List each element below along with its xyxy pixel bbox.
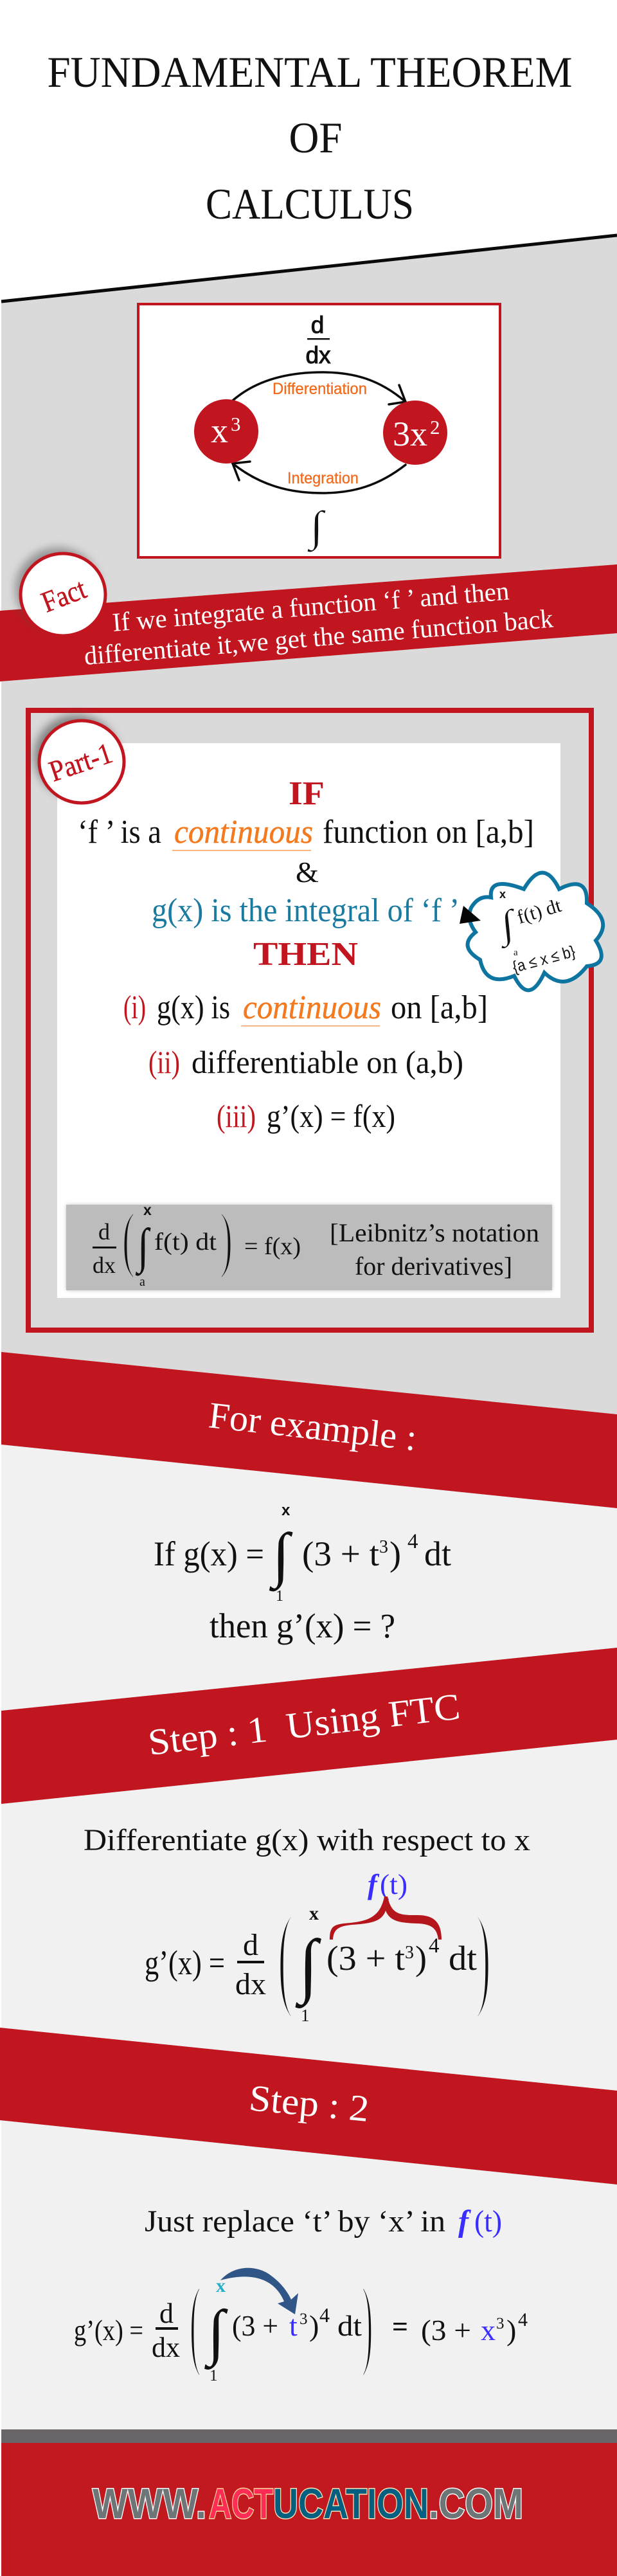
step 1 instruction: Differentiate g(x) with respect to x bbox=[84, 1823, 530, 1857]
example question bbox=[154, 1502, 451, 1645]
step 1 formula: ) bbox=[415, 1939, 427, 1977]
step 1 formula: x bbox=[309, 1903, 319, 1924]
label: integration: Integration bbox=[287, 469, 359, 487]
heading: if: IF bbox=[289, 775, 325, 812]
circle: x cubed: 3 bbox=[231, 413, 240, 435]
circle: x cubed bbox=[194, 399, 258, 464]
condition: g(x) is the integral: g(x) is the integral of ‘f ’ bbox=[152, 892, 460, 929]
formula bbox=[93, 1197, 301, 1289]
integral symbol: ∫ bbox=[307, 503, 326, 553]
step 2 formula: d bbox=[159, 2298, 174, 2329]
label: f(t) bbox=[368, 1869, 407, 1900]
banner: for example: For example : bbox=[207, 1394, 419, 1459]
condition: f is continuous bbox=[78, 814, 534, 851]
result i: continuous: on [a,b] bbox=[391, 989, 488, 1026]
result i: continuous: continuous bbox=[243, 989, 381, 1026]
derivative operator d/dx: dx bbox=[305, 342, 331, 368]
result i: continuous bbox=[123, 989, 488, 1027]
callout: cloud with integral definition: x bbox=[499, 888, 506, 901]
formula: a bbox=[139, 1275, 145, 1289]
circle: 3x squared: 2 bbox=[430, 416, 440, 438]
banner: step 1: Step : 1 Using FTC bbox=[146, 1685, 462, 1763]
banner: step 1 bbox=[1, 1648, 617, 1804]
title: OF bbox=[289, 113, 342, 162]
panel: leibniz notation bbox=[66, 1197, 552, 1290]
step 2 formula: (3 + bbox=[421, 2314, 471, 2346]
step 2 formula: 4 bbox=[518, 2309, 528, 2330]
step 2 formula bbox=[74, 2267, 528, 2384]
circle: 3x squared: 3x bbox=[393, 415, 427, 453]
example question: then g’(x) = ? bbox=[210, 1607, 395, 1645]
logo text: ACT bbox=[209, 2480, 273, 2527]
step 2 formula: ) bbox=[506, 2314, 516, 2346]
step 2 instruction: f bbox=[458, 2204, 471, 2238]
brace: f(t) bbox=[330, 1896, 442, 1940]
label: f(t): (t) bbox=[380, 1869, 407, 1900]
step 2 instruction: Just replace ‘t’ by ‘x’ in bbox=[145, 2204, 445, 2238]
footer band bbox=[1, 2429, 617, 2443]
example question: (3 + t bbox=[302, 1535, 379, 1573]
step 2 formula: g’(x) = bbox=[74, 2314, 143, 2346]
step 2 formula: dt bbox=[337, 2309, 362, 2342]
step 2 formula: (3 + bbox=[232, 2309, 278, 2342]
heading: then: THEN bbox=[253, 936, 358, 973]
panel: differentiation and integration cycle bbox=[138, 304, 500, 557]
step 2 instruction: (t) bbox=[474, 2204, 502, 2238]
result iii: derivative: (iii) bbox=[217, 1098, 256, 1134]
step 1 formula: 4 bbox=[429, 1934, 440, 1958]
ampersand: & bbox=[296, 856, 319, 888]
step 1 formula: dx bbox=[235, 1967, 266, 2001]
step 1 formula: 3 bbox=[405, 1943, 414, 1963]
title bbox=[48, 48, 572, 228]
callout: cloud with integral definition bbox=[468, 873, 603, 990]
note bbox=[330, 1218, 539, 1281]
footer: website logo bbox=[1, 2443, 617, 2576]
badge: fact: Fact bbox=[37, 572, 91, 618]
formula: ( bbox=[122, 1197, 135, 1279]
step 2 formula: t bbox=[289, 2309, 298, 2342]
example question: 4 bbox=[407, 1530, 418, 1553]
step 2 formula: ) bbox=[309, 2309, 319, 2342]
condition: f is continuous: ‘f ’ is a bbox=[78, 814, 161, 851]
callout: cloud with integral definition: {a ≤ x ≤ b} bbox=[510, 942, 577, 977]
result i: continuous: g(x) is bbox=[157, 989, 230, 1026]
result ii: differentiable: differentiable on (a,b) bbox=[192, 1044, 463, 1080]
badge: part 1: Part-1 bbox=[45, 736, 116, 788]
step 1 formula: g’(x) = bbox=[145, 1943, 225, 1982]
arrow: integration arc bbox=[233, 462, 406, 493]
callout: cloud with integral definition: ∫ bbox=[496, 901, 519, 949]
note: for derivatives] bbox=[355, 1252, 512, 1281]
logo text bbox=[93, 2480, 523, 2527]
step 2 formula: 4 bbox=[319, 2303, 330, 2327]
label: f(t): f bbox=[368, 1869, 380, 1900]
step 2 formula: ∫ bbox=[204, 2298, 228, 2370]
result i: continuous: (i) bbox=[123, 989, 146, 1026]
badge: part 1 bbox=[34, 715, 124, 803]
formula: ∫ bbox=[135, 1219, 151, 1276]
step 1 formula: d bbox=[243, 1928, 258, 1962]
black diagonal divider bbox=[1, 235, 617, 302]
step 2 formula: = bbox=[392, 2311, 408, 2343]
step 1 formula: ( bbox=[278, 1891, 293, 2020]
step 2 formula: x bbox=[481, 2314, 496, 2346]
example question: 1 bbox=[276, 1588, 283, 1605]
result iii: derivative: g’(x) = f(x) bbox=[267, 1098, 395, 1134]
arrow: differentiation arc bbox=[233, 372, 406, 404]
fact text: differentiate it,we get the same function back bbox=[83, 603, 555, 671]
step 1 formula bbox=[145, 1891, 491, 2025]
derivative operator d/dx bbox=[305, 312, 331, 368]
banner: fact bbox=[0, 548, 617, 681]
arrow: callout pointer bbox=[460, 906, 481, 924]
condition: f is continuous: function on [a,b] bbox=[323, 814, 534, 851]
step 2 formula: ) bbox=[362, 2267, 373, 2379]
example question: If g(x) = bbox=[154, 1535, 264, 1573]
formula: dx bbox=[93, 1252, 116, 1278]
step 2 formula: 3 bbox=[300, 2310, 307, 2328]
fact text: If we integrate a function ‘f ’ and then bbox=[111, 575, 510, 637]
derivative operator d/dx: d bbox=[311, 312, 324, 338]
logo text: UCATION bbox=[273, 2480, 429, 2527]
logo text: .COM bbox=[429, 2480, 523, 2527]
formula: d bbox=[98, 1219, 110, 1245]
step 1 formula: ) bbox=[476, 1891, 491, 2020]
example question: x bbox=[282, 1502, 291, 1519]
step 1 formula: (3 + t bbox=[326, 1939, 405, 1977]
step 2 formula: 1 bbox=[210, 2367, 217, 2384]
label: differentiation: Differentiation bbox=[273, 380, 367, 398]
step 1 formula: ∫ bbox=[295, 1925, 321, 2009]
banner: step 2: Step : 2 bbox=[247, 2076, 371, 2130]
example question: dt bbox=[424, 1535, 451, 1573]
formula: = f(x) bbox=[244, 1233, 301, 1260]
title: CALCULUS bbox=[206, 179, 414, 228]
example question: ∫ bbox=[269, 1520, 293, 1592]
formula: x bbox=[143, 1202, 152, 1218]
circle: 3x squared bbox=[383, 401, 447, 465]
badge: fact bbox=[15, 548, 105, 636]
callout: cloud with integral definition: f(t) dt bbox=[515, 895, 564, 928]
callout: cloud with integral definition: a bbox=[514, 948, 518, 958]
note: [Leibnitz’s notation bbox=[330, 1218, 539, 1247]
banner: step 2 bbox=[0, 2028, 617, 2184]
result ii: differentiable: (ii) bbox=[148, 1044, 180, 1080]
step 2 formula: ( bbox=[190, 2267, 201, 2379]
step 1 formula: dt bbox=[449, 1939, 477, 1977]
formula: f(t) dt bbox=[154, 1229, 217, 1256]
arrow: replace t by x bbox=[220, 2268, 298, 2314]
panel: part 1 theorem bbox=[28, 710, 603, 1330]
step 2 formula: x bbox=[216, 2275, 226, 2296]
title: FUNDAMENTAL THEOREM bbox=[48, 48, 572, 96]
example question: ) bbox=[389, 1535, 401, 1573]
step 2 formula: 3 bbox=[496, 2315, 504, 2332]
example question: 3 bbox=[379, 1537, 388, 1557]
condition: f is continuous: continuous bbox=[174, 814, 313, 851]
circle: x cubed: x bbox=[211, 411, 228, 450]
formula: ) bbox=[220, 1197, 233, 1279]
banner: for example bbox=[1, 1352, 617, 1508]
step 1 formula: 1 bbox=[301, 2006, 310, 2025]
result iii: derivative bbox=[217, 1098, 395, 1134]
logo text: WWW. bbox=[93, 2480, 206, 2527]
step 2 formula: dx bbox=[152, 2332, 180, 2363]
